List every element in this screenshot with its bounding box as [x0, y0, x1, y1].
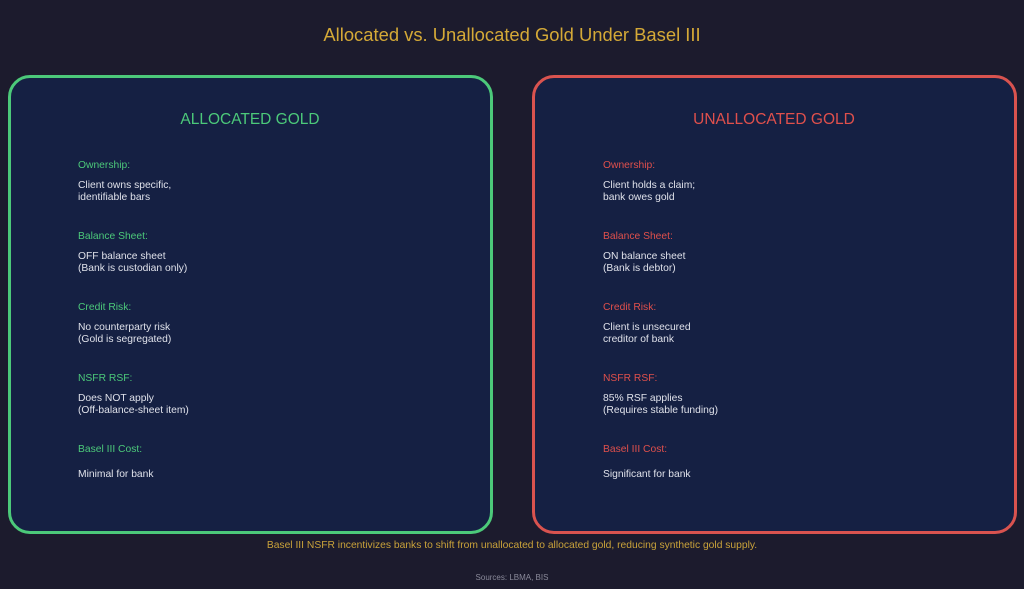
title: Allocated vs. Unallocated Gold Under Basel III	[323, 24, 701, 45]
panel: unallocated gold	[532, 75, 1017, 534]
text: OFF balance sheet	[78, 251, 166, 262]
footer note: Basel III NSFR incentivizes banks to shift from unallocated to allocated gold, reducing synthetic gold supply.	[267, 540, 757, 551]
text: Minimal for bank	[78, 469, 154, 480]
unallocated rows	[603, 160, 718, 480]
text: NSFR RSF:	[78, 373, 132, 384]
text: Significant for bank	[603, 469, 691, 480]
text: Credit Risk:	[603, 302, 656, 313]
text: ON balance sheet	[603, 251, 685, 262]
text: Credit Risk:	[78, 302, 131, 313]
text: 85% RSF applies	[603, 393, 683, 404]
text: (Off-balance-sheet item)	[78, 404, 189, 416]
text: bank owes gold	[603, 192, 675, 202]
sources: Sources: LBMA, BIS	[476, 573, 548, 582]
text: Client owns specific,	[78, 180, 171, 191]
text: Basel III Cost:	[603, 444, 667, 455]
text: identifiable bars	[78, 192, 150, 202]
text: (Gold is segregated)	[78, 334, 171, 344]
heading: unallocated gold: UNALLOCATED GOLD	[693, 111, 855, 128]
text: Ownership:	[78, 160, 130, 171]
text: (Requires stable funding)	[603, 404, 718, 416]
text: No counterparty risk	[78, 322, 170, 333]
text: (Bank is custodian only)	[78, 262, 187, 274]
text: Does NOT apply	[78, 393, 154, 404]
text: Client holds a claim;	[603, 180, 695, 191]
heading: allocated gold: ALLOCATED GOLD	[180, 111, 320, 128]
panel: allocated gold	[8, 75, 493, 534]
allocated rows	[78, 160, 189, 480]
text: NSFR RSF:	[603, 373, 657, 384]
text: Client is unsecured	[603, 322, 691, 333]
text: Balance Sheet:	[78, 231, 148, 242]
text: Basel III Cost:	[78, 444, 142, 455]
text: Ownership:	[603, 160, 655, 171]
text: (Bank is debtor)	[603, 262, 676, 274]
text: creditor of bank	[603, 334, 674, 344]
text: Balance Sheet:	[603, 231, 673, 242]
